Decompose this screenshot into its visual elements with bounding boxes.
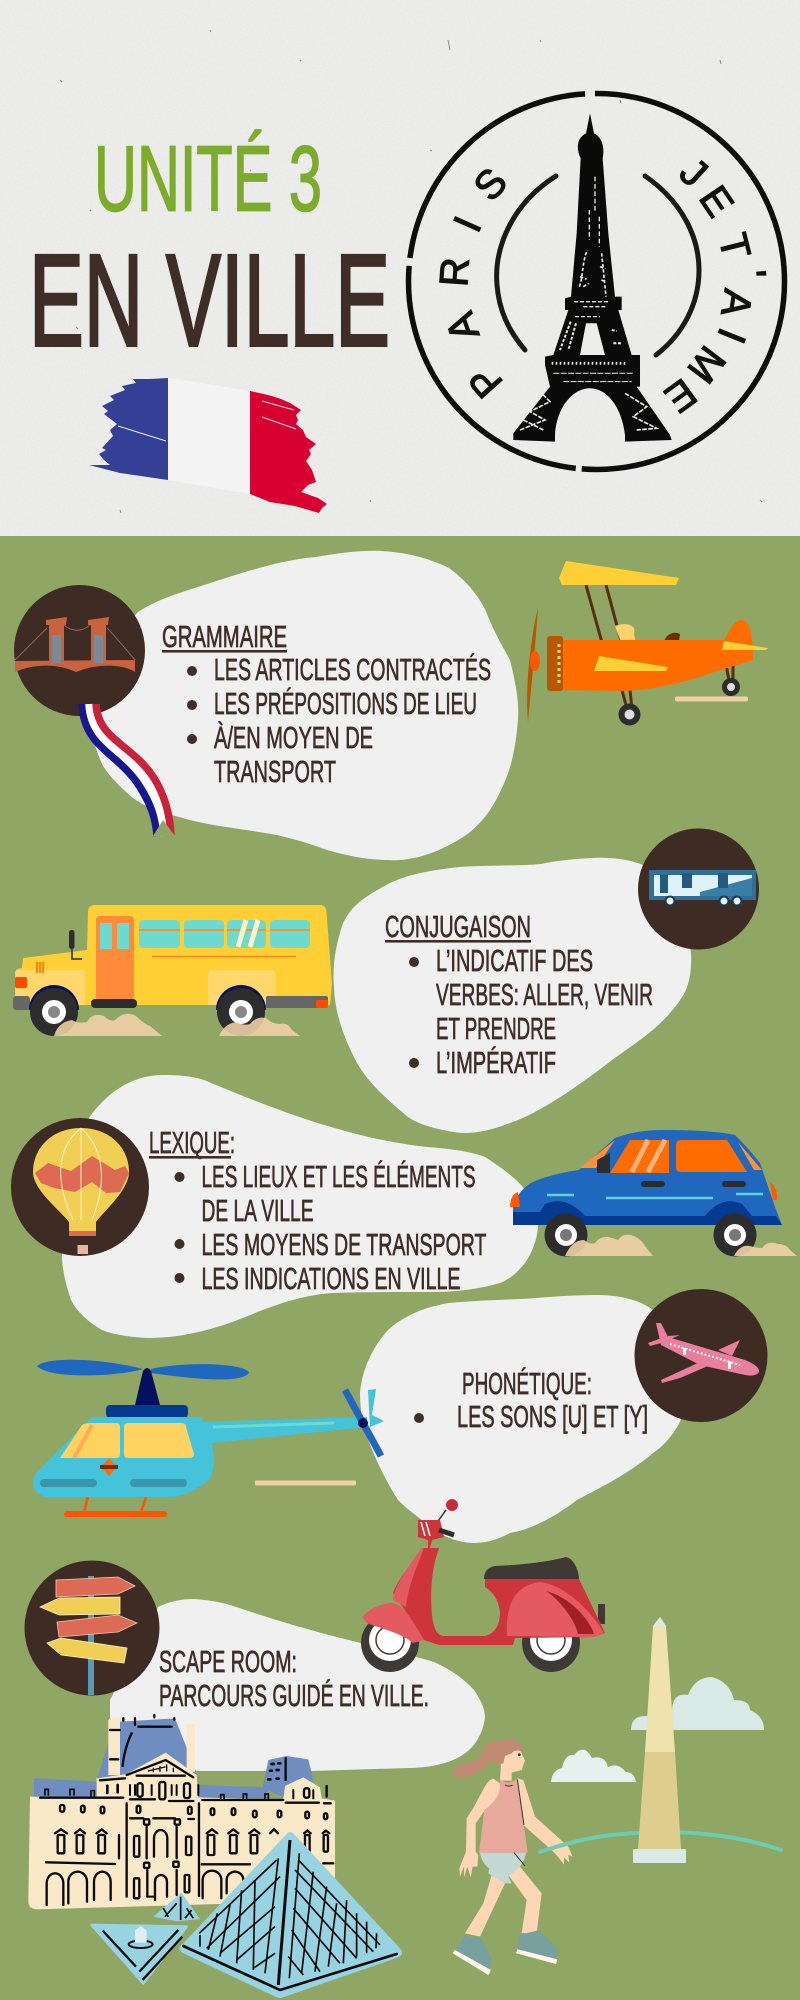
icon: walking woman [453, 1739, 573, 1975]
heading: grammaire: GRAMMAIRE [162, 620, 287, 654]
text: grammaire: À/EN MOYEN DE [214, 720, 373, 755]
icon: yellow school bus [13, 905, 332, 1036]
top and shorts [480, 1853, 526, 1883]
icon: french flag brush [89, 378, 327, 513]
circle icon: bridge [14, 585, 145, 716]
text: lexique: DE LA VILLE [202, 1194, 314, 1228]
text: escape room: SCAPE ROOM: [159, 1645, 297, 1679]
small cloud [551, 1750, 636, 1782]
ribbon: french colours [82, 704, 175, 836]
text: phonétique: PHONÉTIQUE: [462, 1366, 592, 1401]
icon: red scooter [361, 1498, 605, 1672]
green background [0, 536, 800, 2000]
text: escape room: PARCOURS GUIDÉ EN VILLE. [159, 1678, 429, 1713]
arms [459, 1779, 500, 1877]
stamp lettering: I [446, 210, 490, 238]
stamp lettering: A [438, 307, 488, 346]
icon: louvre palace [28, 1715, 335, 1909]
stamp lettering: A [712, 286, 760, 320]
text: escape room [159, 1645, 429, 1713]
stamp lettering: S [465, 160, 516, 209]
text: conjugaison: ET PRENDRE [436, 1012, 556, 1046]
icon: louvre pyramids [92, 1832, 402, 1998]
ponytail [453, 1750, 495, 1777]
text: conjugaison: VERBES: ALLER, VENIR [436, 978, 653, 1012]
text: grammaire: LES ARTICLES CONTRACTÉS [214, 652, 491, 687]
icon: eiffel tower [513, 113, 672, 442]
circle icon: pink airplane [634, 1289, 768, 1422]
panel: escape room blob [110, 1599, 485, 1771]
stamp lettering: M [679, 338, 734, 391]
panel: conjugaison blob [333, 858, 691, 1133]
palace linework [40, 1715, 333, 1905]
circle icon: hot air balloon [11, 1118, 149, 1256]
panel: grammaire blob [77, 551, 518, 860]
text: grammaire: TRANSPORT [214, 755, 336, 789]
stamp lettering: ' [729, 269, 773, 279]
stamp lettering: T [710, 229, 758, 263]
title: unité 3: UNITÉ 3 [94, 126, 322, 230]
stamp lettering: E [690, 178, 742, 225]
icon: helicopter [33, 1360, 384, 1517]
icon: blue car [510, 1130, 797, 1256]
title: en ville: EN VILLE [29, 226, 390, 374]
text: conjugaison [385, 910, 653, 1080]
triangular basin [92, 1925, 187, 1983]
text: lexique [149, 1126, 486, 1296]
heading: conjugaison: CONJUGAISON [385, 910, 531, 944]
text: conjugaison: L’INDICATIF DES [436, 944, 593, 978]
legs [465, 1867, 542, 1937]
palace roofs [34, 1718, 313, 1798]
text: phonétique [414, 1366, 648, 1434]
icon: obelisk [633, 1617, 686, 1863]
circle icon: direction signs [24, 1560, 160, 1696]
small pyramid [153, 1893, 200, 1921]
big cloud [631, 1677, 764, 1730]
heading: lexique: LEXIQUE: [149, 1126, 235, 1160]
text: conjugaison: L’IMPÉRATIF [436, 1045, 556, 1080]
stamp: paris je t'aime [408, 94, 784, 470]
head [500, 1750, 525, 1781]
stamp lettering [432, 150, 773, 421]
text: lexique: LES LIEUX ET LES ÉLÉMENTS [202, 1159, 476, 1194]
stamp inner arcs [497, 176, 699, 355]
icon: orange biplane [527, 561, 768, 726]
bridge [15, 617, 135, 672]
circle icon: bus [638, 828, 759, 950]
stamp lettering: P [460, 357, 511, 406]
text: lexique: LES MOYENS DE TRANSPORT [202, 1228, 486, 1262]
text: grammaire: LES PRÉPOSITIONS DE LIEU [214, 686, 477, 721]
green hill line [540, 1832, 781, 1852]
text: phonétique: LES SONS [U] ET [Y] [457, 1400, 648, 1434]
text: lexique: LES INDICATIONS EN VILLE [202, 1262, 460, 1296]
shoes [455, 1930, 557, 1970]
header paper background [0, 0, 800, 641]
stamp lettering: R [432, 256, 478, 288]
stamp lettering: I [709, 322, 754, 349]
palace walls [28, 1718, 335, 1909]
panel: phonétique blob [360, 1295, 690, 1543]
panel: lexique blob [62, 1075, 538, 1338]
stamp lettering: J [671, 150, 715, 196]
stamp outer ring [408, 94, 784, 470]
stamp lettering: E [657, 370, 704, 421]
large pyramid [180, 1832, 402, 1998]
text: grammaire [162, 620, 491, 789]
